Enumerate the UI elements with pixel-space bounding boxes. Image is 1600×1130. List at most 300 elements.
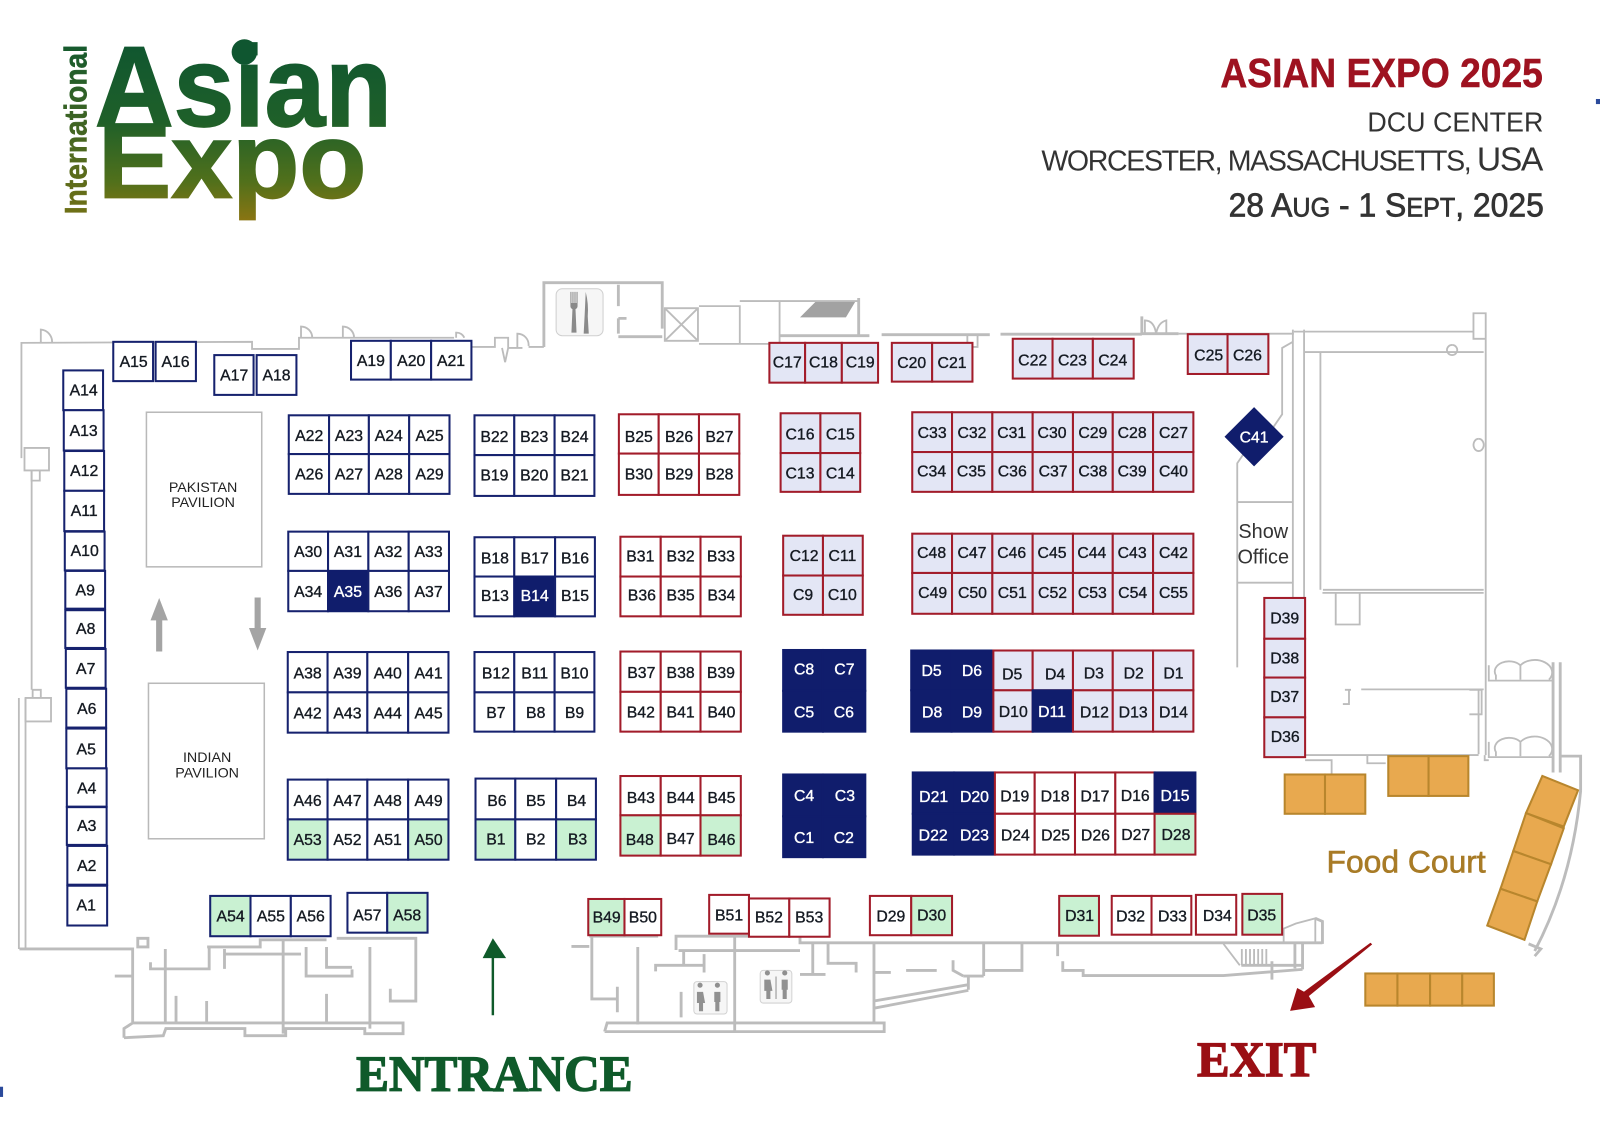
- booth A48: A48: [374, 793, 402, 810]
- booth A49: A49: [415, 793, 443, 810]
- booth A20: [391, 341, 431, 380]
- booths: A22 to A29: [289, 415, 449, 494]
- booths: D36 to D39 east: [1264, 598, 1305, 757]
- booth C32: [952, 412, 992, 452]
- booth A28: [369, 454, 409, 494]
- booth C25: [1188, 334, 1228, 374]
- booth C52: [1033, 573, 1073, 614]
- logo word: International: International: [58, 45, 94, 214]
- booth C21: [932, 343, 972, 382]
- booth B14: B14: [521, 588, 549, 605]
- booth C15: C15: [826, 426, 855, 443]
- booth A33: [409, 532, 449, 571]
- booth D29: [870, 896, 911, 935]
- booth D32: D32: [1116, 908, 1145, 925]
- booth C23: [1053, 339, 1093, 379]
- booth A17: A17: [220, 368, 248, 385]
- booths: A46 to A53: [288, 780, 448, 860]
- booth B23: B23: [520, 429, 548, 446]
- pavilion label: PAVILION: [171, 495, 235, 511]
- booth D24: D24: [1001, 827, 1030, 844]
- walls: south east rooms: [1021, 918, 1322, 980]
- booth D37: [1264, 678, 1305, 717]
- booth A36: [368, 571, 409, 611]
- booth D16: [1115, 772, 1155, 814]
- booth A5: A5: [77, 742, 96, 759]
- label: ENTRANCE: ENTRANCE: [356, 1047, 633, 1103]
- booth C7: C7: [834, 661, 854, 678]
- booth B52: [749, 898, 789, 937]
- booth C14: C14: [826, 466, 855, 483]
- booth B44: B44: [667, 790, 695, 807]
- walls: north doors: [967, 320, 1166, 347]
- walls: food court side: [1305, 660, 1552, 776]
- booth D5 navy: D5: [922, 663, 942, 680]
- booth D18: D18: [1041, 789, 1070, 806]
- booth D15: D15: [1161, 788, 1190, 805]
- booth A31: [328, 532, 368, 571]
- booth C31: [992, 412, 1033, 452]
- restrooms: [694, 970, 792, 1014]
- walls: north and west hall outline: [19, 327, 544, 949]
- booth C42: C42: [1159, 545, 1188, 562]
- booth C34: C34: [917, 464, 946, 481]
- booth A39: [328, 652, 367, 692]
- booth B12: B12: [482, 666, 510, 683]
- booth C23: C23: [1058, 352, 1087, 369]
- booth C36: C36: [998, 464, 1027, 481]
- booth C52: C52: [1038, 585, 1067, 602]
- booth D31: [1059, 896, 1099, 936]
- booth A27: [329, 454, 369, 494]
- booth B22: B22: [480, 429, 508, 446]
- booth D11: D11: [1038, 704, 1066, 721]
- booth B20: B20: [520, 468, 548, 485]
- booth C1: C1: [794, 830, 814, 847]
- booth A58: [387, 893, 428, 933]
- walls: west side boxes: [24, 448, 51, 721]
- booth C11: C11: [828, 548, 856, 565]
- C41 label: C41: [1240, 429, 1269, 446]
- booth D3: D3: [1084, 666, 1104, 683]
- booth B30: B30: [625, 467, 653, 484]
- booth C5: C5: [794, 704, 814, 721]
- booth C30: [1033, 412, 1073, 452]
- booth D14: [1153, 690, 1193, 732]
- booth C51: C51: [998, 585, 1027, 602]
- booth B49: [588, 899, 624, 935]
- booth A44: A44: [374, 705, 402, 722]
- booth B1: B1: [486, 831, 506, 848]
- booth A12: [64, 451, 104, 491]
- booth D36: [1264, 717, 1305, 757]
- booth C46: C46: [997, 545, 1026, 562]
- booth B52: B52: [755, 909, 783, 926]
- booth A7: [66, 649, 106, 688]
- booth A37: A37: [415, 584, 443, 601]
- label: EXIT: EXIT: [1197, 1031, 1316, 1087]
- booth D10: D10: [999, 704, 1028, 721]
- booth A50: [408, 819, 448, 860]
- booth A2: [67, 846, 107, 885]
- icon: fork and knife: [570, 292, 589, 334]
- booth D21: D21: [919, 789, 948, 806]
- booth D30: [911, 896, 952, 935]
- booth D23: [954, 814, 995, 855]
- booth D27: [1115, 814, 1155, 855]
- booth A35: [328, 571, 368, 611]
- booth A9: [65, 571, 105, 609]
- booth A50: A50: [415, 832, 443, 849]
- booth A4: A4: [77, 780, 97, 797]
- booth D26: D26: [1081, 827, 1110, 844]
- booth A16: A16: [161, 354, 190, 371]
- booth D10: [993, 690, 1033, 732]
- booth A18: [257, 355, 296, 395]
- booths: C27 to C40: [912, 412, 1193, 492]
- booth D14: D14: [1159, 704, 1188, 721]
- booth A21: A21: [437, 353, 465, 370]
- booth B51: [709, 895, 749, 934]
- booth D24: [995, 814, 1035, 855]
- booth B47: B47: [667, 831, 695, 848]
- booth B29: B29: [665, 467, 693, 484]
- booth C36: [992, 452, 1033, 492]
- booth A12: A12: [70, 463, 98, 480]
- booth A35: A35: [334, 584, 362, 601]
- booth A10: [65, 532, 105, 570]
- venue location: WORCESTER, MASSACHUSETTS, USA: [1041, 141, 1544, 178]
- booth D13: [1113, 690, 1153, 732]
- booth C53: C53: [1078, 585, 1107, 602]
- logo word: Expo: Expo: [98, 101, 366, 221]
- booth D6: [952, 651, 993, 690]
- booths: C1 to C4: [783, 774, 865, 857]
- kitchen sign: [556, 289, 603, 336]
- booth A27: A27: [335, 467, 363, 484]
- booth D4: [1033, 651, 1073, 690]
- logo word: Asian: Asian: [95, 24, 392, 151]
- booth C18: C18: [809, 354, 838, 371]
- booth A15: A15: [120, 354, 148, 371]
- arrow: grey down: [249, 597, 266, 651]
- booth C24: C24: [1098, 352, 1127, 369]
- booth C50: [952, 573, 992, 614]
- booth A25: A25: [416, 428, 444, 445]
- booth A32: A32: [374, 544, 402, 561]
- booth A8: [65, 610, 105, 648]
- booth A47: [328, 780, 367, 819]
- booth A13: A13: [70, 423, 98, 440]
- booth C42: [1153, 534, 1193, 573]
- booths: B25 to B30: [619, 414, 739, 495]
- booth A17: [214, 355, 254, 395]
- booth A16: [156, 342, 196, 381]
- booths: B19 to B24: [474, 415, 594, 496]
- booth D34: [1196, 895, 1236, 935]
- booths: A38 to A45: [288, 652, 448, 733]
- booth D29: D29: [876, 908, 906, 925]
- food court stalls: [1285, 756, 1578, 1006]
- icon: restroom figures: [697, 983, 720, 1011]
- booth C47: [952, 534, 992, 573]
- booth C46: [992, 534, 1033, 573]
- walls: east screen: [1529, 662, 1581, 956]
- booth C27: [1153, 412, 1193, 452]
- walls: south centre rooms: [571, 936, 1022, 1032]
- booth D33: D33: [1158, 908, 1187, 925]
- booth D27: D27: [1121, 827, 1150, 844]
- booth C39: [1113, 452, 1153, 492]
- booth B53: B53: [795, 909, 823, 926]
- booth A18: A18: [262, 368, 291, 385]
- booth D15: [1155, 772, 1195, 814]
- booth A14: [63, 370, 103, 410]
- booth C40: [1153, 452, 1193, 492]
- booth B36: B36: [628, 588, 656, 605]
- booth A52: A52: [333, 832, 362, 849]
- booth A45: [408, 692, 448, 733]
- booth A52: [328, 819, 367, 860]
- booths: A30 to A37: [288, 532, 449, 611]
- booth D12: [1073, 690, 1113, 732]
- booth D9: D9: [962, 704, 982, 721]
- booth C32: C32: [957, 425, 986, 442]
- booth C19: [842, 343, 878, 383]
- walls: north sections: [780, 298, 1179, 337]
- booth A45: A45: [415, 705, 443, 722]
- booth A11: A11: [71, 503, 98, 520]
- booths: B1 to B6: [476, 779, 596, 860]
- booth A14: A14: [70, 382, 98, 399]
- pavilion label: PAKISTAN: [169, 480, 237, 496]
- booth A24: [369, 415, 409, 454]
- booth D19: [995, 772, 1035, 814]
- booth C54: C54: [1118, 585, 1147, 602]
- booth B3: B3: [568, 831, 587, 848]
- booth B17: B17: [521, 550, 549, 567]
- booth A40: A40: [374, 666, 402, 683]
- booth C41 diamond: [1224, 407, 1284, 466]
- booth D11: [1033, 690, 1073, 732]
- booth A53: A53: [294, 832, 322, 849]
- booth A5: [66, 729, 106, 768]
- booth C4: C4: [794, 788, 814, 805]
- booth B42: B42: [627, 704, 655, 721]
- booth C37: C37: [1039, 464, 1068, 481]
- booth B4: B4: [567, 793, 586, 810]
- booth C17: C17: [773, 354, 802, 371]
- booth A46: A46: [294, 793, 322, 810]
- walls: southwest rooms: [19, 938, 416, 1038]
- booth A42: A42: [294, 705, 322, 722]
- booth B31: B31: [626, 549, 655, 566]
- booths: A west column: [63, 370, 107, 926]
- label: Show Office: Office: [1237, 546, 1289, 568]
- booth A7: A7: [76, 661, 95, 678]
- booth C26: C26: [1233, 348, 1262, 365]
- booth A30: [288, 532, 328, 571]
- booth A8: A8: [76, 621, 96, 638]
- booth A4: [67, 768, 107, 807]
- booth C3: C3: [835, 788, 855, 805]
- booth C13: C13: [786, 466, 815, 483]
- booth A30: A30: [294, 544, 322, 561]
- booth D33: [1152, 896, 1191, 935]
- booth C55: [1153, 573, 1193, 614]
- booth D16: D16: [1121, 788, 1150, 805]
- booths: C13 to C16: [781, 413, 860, 492]
- booths: C17 to C26 north wall: [769, 334, 1268, 383]
- booth B35: B35: [667, 588, 695, 605]
- booth B48: B48: [626, 832, 654, 849]
- booth D39: D39: [1270, 610, 1299, 627]
- booth B18: B18: [481, 550, 509, 567]
- booth A40: [367, 652, 408, 692]
- booth A22: [289, 415, 329, 454]
- booths: B31 to B36: [620, 537, 741, 616]
- booths: B13 to B18: [474, 537, 595, 616]
- arrow: exit: [1291, 943, 1371, 1010]
- booth C54: [1113, 573, 1153, 614]
- booth A56: A56: [297, 908, 325, 925]
- booth A55: [251, 896, 291, 936]
- booth C8: C8: [794, 661, 814, 678]
- booth D1: D1: [1163, 666, 1184, 683]
- booth B27: B27: [705, 429, 733, 446]
- booth D5: D5: [1002, 667, 1023, 684]
- booth B49: B49: [593, 909, 621, 926]
- booth A6: A6: [77, 701, 97, 718]
- booth A29: A29: [416, 467, 444, 484]
- venue name: DCU CENTER: [1367, 107, 1543, 138]
- walls: east hall: [1293, 313, 1486, 755]
- booth A57: A57: [353, 907, 381, 924]
- booth A54: [210, 896, 251, 936]
- booth D5: [993, 651, 1033, 690]
- booth A51: [367, 819, 408, 860]
- booth A1: A1: [77, 898, 96, 915]
- booth C43: C43: [1118, 545, 1147, 562]
- booth A28: A28: [375, 467, 403, 484]
- booth C29: [1073, 412, 1113, 452]
- booth A32: [368, 532, 409, 571]
- booth A29: [409, 454, 449, 494]
- booth B6: B6: [487, 793, 507, 810]
- booth D21: [913, 772, 954, 814]
- booth B50: [624, 899, 661, 935]
- booth D35: D35: [1247, 907, 1276, 924]
- booth C18: [805, 343, 842, 383]
- booth C49: C49: [918, 585, 947, 602]
- booth B7: B7: [486, 705, 506, 722]
- booth C49: [912, 573, 952, 614]
- booth A38: A38: [294, 666, 322, 683]
- booth B50: B50: [629, 909, 657, 926]
- booth D36: D36: [1271, 729, 1300, 746]
- booth B19: B19: [480, 468, 509, 485]
- booth D22: D22: [919, 827, 948, 844]
- booth C27: C27: [1159, 425, 1188, 442]
- booth B41: B41: [667, 704, 695, 721]
- booth B53: [789, 898, 830, 937]
- booth C29: C29: [1078, 425, 1108, 442]
- logo: International Asian Expo: [58, 24, 392, 221]
- walls: show office: [1237, 342, 1484, 667]
- booth B9: B9: [565, 705, 584, 722]
- booth C35: C35: [957, 464, 986, 481]
- icon: ramp: [800, 302, 855, 317]
- booth D9: [952, 690, 993, 732]
- booth D32: [1112, 896, 1152, 935]
- booth B25: B25: [625, 429, 653, 446]
- booth A41: [408, 652, 448, 692]
- booth B10: B10: [560, 666, 589, 683]
- booth B39: B39: [707, 665, 735, 682]
- booth C21: C21: [938, 355, 967, 372]
- booth D17: [1075, 772, 1115, 814]
- booth C22: C22: [1018, 352, 1047, 369]
- booth B24: B24: [560, 429, 589, 446]
- booths: D1 to D14: [911, 651, 1193, 732]
- booth C34: [912, 452, 952, 492]
- booths: D29 to D35 south wall: [870, 894, 1282, 936]
- booth C28: C28: [1118, 425, 1147, 442]
- booth A49: [408, 780, 448, 819]
- booth D31: D31: [1065, 908, 1094, 925]
- booths: B43 to B48: [620, 776, 741, 856]
- logo i dot: [232, 39, 257, 65]
- booth A57: [347, 893, 387, 933]
- floor plan walls: [19, 283, 1581, 1038]
- pavilion label: PAVILION: [175, 766, 239, 782]
- booths: B37 to B42: [620, 652, 741, 732]
- booth A23: [329, 415, 369, 454]
- booths: C9 to C12: [783, 536, 863, 615]
- booth A15: [113, 342, 153, 381]
- booth A56: [291, 896, 331, 936]
- arrow: grey up: [151, 598, 168, 652]
- booth C33: C33: [918, 425, 947, 442]
- booth A19: A19: [357, 353, 385, 370]
- booth D23: D23: [960, 827, 989, 844]
- label: Food Court: Food Court: [1327, 843, 1486, 879]
- booth A19: [351, 341, 391, 380]
- booth C20: [892, 343, 932, 382]
- booth A3: A3: [77, 818, 97, 835]
- booth A20: A20: [397, 353, 425, 370]
- stairs: [1223, 918, 1315, 965]
- booth D17: D17: [1080, 789, 1109, 806]
- booth B37: B37: [627, 665, 655, 682]
- booth A39: A39: [333, 666, 362, 683]
- icon: restroom figures second: [764, 970, 788, 999]
- booth C9: C9: [793, 587, 813, 604]
- label: Show Office: Show: [1238, 521, 1289, 543]
- booth C39: C39: [1118, 464, 1147, 481]
- event dates: 28 AUG - 1 SEPT, 2025: [1229, 187, 1544, 224]
- booth C35: [952, 452, 992, 492]
- booth B28: B28: [705, 467, 734, 484]
- booth D38: [1264, 639, 1305, 678]
- room: elevator: [665, 301, 858, 344]
- booth A26: A26: [295, 467, 323, 484]
- booth D12: D12: [1080, 704, 1109, 721]
- booth D39: [1264, 598, 1305, 639]
- pavilion label: INDIAN: [183, 750, 231, 766]
- room: kitchen: [544, 283, 662, 347]
- booth B40: B40: [707, 704, 736, 721]
